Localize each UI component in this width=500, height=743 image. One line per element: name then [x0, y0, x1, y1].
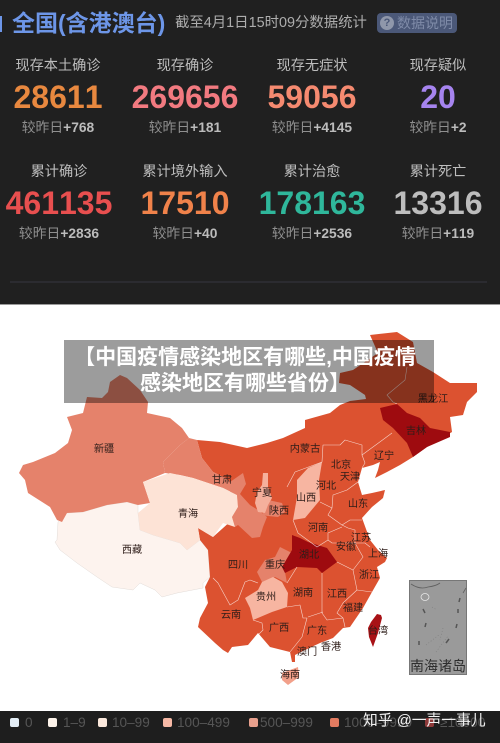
region: Jilin	[380, 404, 450, 457]
stat: local current confirmed	[14, 58, 102, 135]
legend label over 10000: ≥10000	[440, 715, 485, 730]
legend label 0: 0	[25, 715, 33, 730]
region: Guizhou	[245, 577, 288, 620]
title: 全国(含港澳台)	[12, 10, 165, 36]
button: data notes	[377, 13, 457, 33]
province names: 山西	[296, 492, 316, 504]
stat: total imported: 较昨日+40	[153, 226, 217, 241]
legend swatch over 10000	[425, 718, 434, 727]
stat: current asymptomatic	[268, 58, 356, 135]
inset label: 南海诸岛	[410, 658, 466, 674]
province names: 云南	[221, 608, 241, 621]
province names: 香港	[321, 641, 341, 653]
province names: 新疆	[94, 442, 114, 455]
legend bar	[0, 711, 500, 743]
province names: 海南	[280, 668, 300, 681]
region: Xinjiang	[19, 375, 189, 522]
stat: total confirmed: 累计确诊	[31, 164, 87, 180]
province names: 内蒙古	[290, 442, 320, 455]
stat: total recovered: 178163	[259, 185, 365, 221]
stat: current confirmed: 现存确诊	[157, 58, 213, 74]
stat: current suspected: 较昨日+2	[409, 120, 467, 135]
province names: 天津	[340, 471, 360, 483]
province names	[94, 392, 448, 681]
province names: 江西	[327, 588, 347, 600]
province names: 山东	[348, 497, 368, 510]
province names: 台湾	[368, 624, 388, 637]
province names: 吉林	[406, 424, 426, 437]
stat: total recovered	[259, 164, 365, 241]
province names: 安徽	[336, 540, 356, 553]
icon: question mark	[380, 16, 394, 30]
region: Ningxia	[255, 473, 272, 513]
banner line 1: 【中国疫情感染地区有哪些,中国疫情	[74, 346, 416, 369]
province names: 北京	[331, 458, 351, 471]
stat: current confirmed: 269656	[132, 79, 238, 115]
legend swatch 1000-9999	[330, 718, 339, 727]
legend label 1000-9999: 1000–9999	[344, 715, 412, 730]
stat: total deaths: 较昨日+119	[402, 226, 474, 241]
province names: 湖南	[293, 586, 313, 599]
panel: dark statistics header	[0, 0, 500, 305]
region: Hainan	[282, 667, 299, 685]
region: Gansu	[163, 438, 267, 538]
province names: 上海	[368, 547, 388, 560]
region: Qinghai	[138, 473, 238, 550]
region: Hubei	[282, 535, 337, 573]
region: Shaanxi	[262, 500, 285, 517]
province names: 湖北	[299, 549, 319, 561]
province names: 广西	[269, 622, 289, 634]
stat: current asymptomatic: 较昨日+4145	[272, 120, 352, 135]
stat: current confirmed	[132, 58, 238, 135]
region: Shanxi	[293, 462, 322, 520]
stat: total confirmed	[6, 164, 112, 241]
province names: 四川	[228, 560, 248, 571]
province names: 贵州	[256, 590, 276, 603]
stat: current confirmed: 较昨日+181	[149, 120, 221, 135]
watermark: 知乎 @一声一事儿	[363, 713, 486, 729]
stat: total imported: 17510	[140, 185, 229, 221]
region: eastern provinces	[197, 332, 477, 662]
province names: 福建	[343, 601, 363, 614]
province borders	[213, 367, 407, 652]
region: Tibet	[55, 502, 210, 597]
province names: 澳门	[297, 645, 317, 658]
stat: current suspected: 20	[420, 79, 456, 115]
icon: question mark: ?	[384, 17, 390, 29]
banner: article title	[64, 340, 434, 403]
stat: local current confirmed: 现存本土确诊	[15, 58, 101, 74]
region: Taiwan	[368, 614, 382, 647]
stat: current suspected: 现存疑似	[410, 58, 466, 74]
stat: total deaths: 13316	[394, 185, 482, 221]
region: Chongqing	[257, 547, 292, 583]
stat: total recovered: 较昨日+2536	[272, 226, 352, 241]
legend swatch 0	[10, 718, 19, 727]
province names: 陕西	[269, 504, 289, 517]
province names: 浙江	[359, 569, 379, 581]
legend swatch 500-999	[249, 718, 258, 727]
province names: 广东	[307, 624, 327, 637]
province names: 重庆	[265, 558, 285, 571]
timestamp text: 截至4月1日15时09分数据统计	[175, 15, 367, 31]
legend label 1-9: 1–9	[63, 715, 86, 730]
stat: total imported: 累计境外输入	[142, 164, 228, 180]
stat: total deaths	[394, 164, 482, 241]
stat: total imported	[140, 164, 229, 241]
legend swatch 1-9	[48, 718, 57, 727]
province names: 甘肃	[212, 473, 232, 486]
stat: total recovered: 累计治愈	[284, 164, 340, 180]
province names: 西藏	[122, 544, 142, 556]
legend label 10-99: 10–99	[112, 715, 150, 730]
stat: total confirmed: 461135	[6, 185, 112, 221]
legend label 500-999: 500–999	[260, 715, 313, 730]
province names: 河北	[316, 480, 336, 492]
stat: current asymptomatic: 现存无症状	[277, 58, 347, 74]
stat: local current confirmed: 28611	[14, 79, 102, 115]
stat: current asymptomatic: 59056	[268, 79, 356, 115]
legend swatch 10-99	[98, 718, 107, 727]
province names: 宁夏	[252, 486, 272, 499]
stat: local current confirmed: 较昨日+768	[22, 120, 94, 135]
stat: total confirmed: 较昨日+2836	[19, 226, 99, 241]
button label: 数据说明	[397, 15, 453, 31]
province names: 江苏	[351, 531, 371, 544]
inset: South China Sea islands	[410, 580, 466, 674]
stat: total deaths: 累计死亡	[410, 164, 466, 180]
province names: 河南	[308, 521, 328, 534]
title accent bar	[0, 16, 2, 32]
legend swatch 100-499	[163, 718, 172, 727]
province names: 黑龙江	[418, 392, 448, 405]
legend label 100-499: 100–499	[177, 715, 230, 730]
banner line 2: 感染地区有哪些省份】	[140, 372, 350, 395]
province names: 辽宁	[374, 449, 394, 462]
province names: 青海	[178, 507, 198, 520]
stat: current suspected	[409, 58, 467, 135]
